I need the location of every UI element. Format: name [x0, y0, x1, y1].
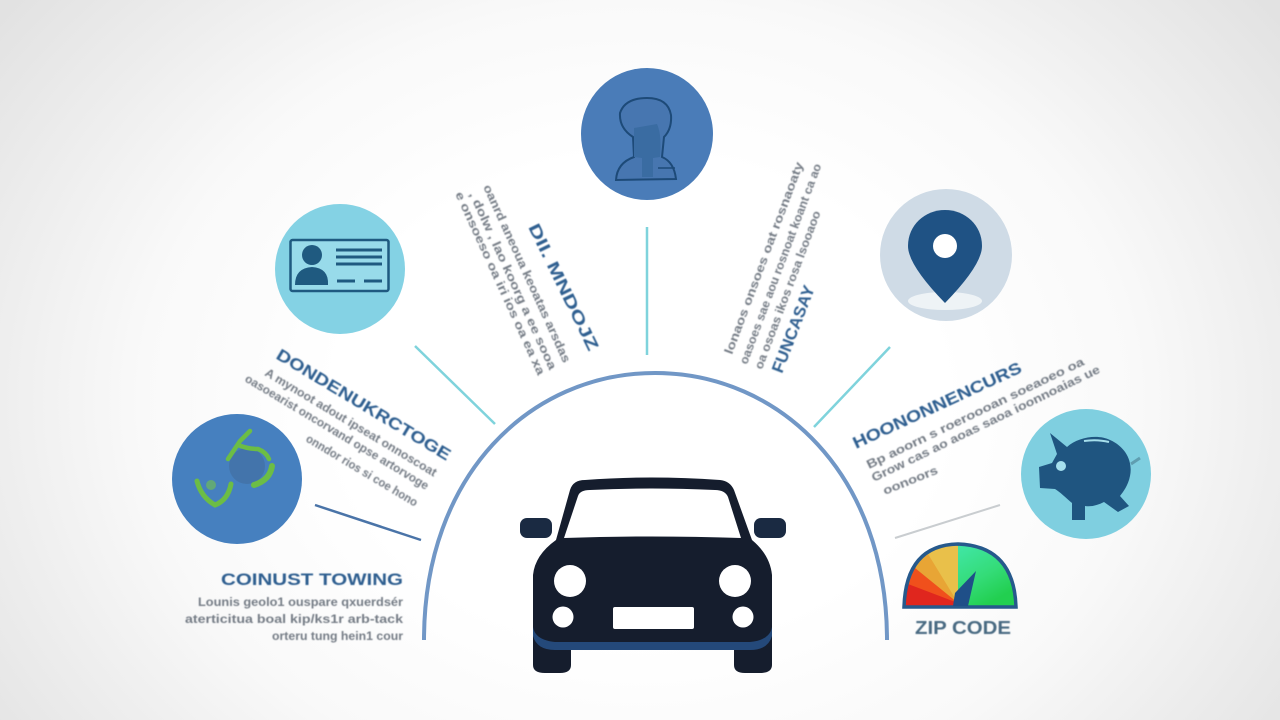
text block: driver left: e onsoeso oa iri ios oa ea xa	[452, 189, 548, 378]
icon: driver profile circle	[581, 68, 713, 200]
text block: savings: oonoors	[881, 463, 940, 498]
text block: licence: oasoearist oncorvand opse artorvoge	[242, 372, 432, 493]
text block: driver right: oa osoas ikos rosa lsooaoo	[752, 209, 824, 371]
connector: zip code	[895, 505, 1000, 538]
icon: piggy bank circle	[1021, 409, 1151, 539]
text block: driver left: DII. MNDOJZ	[524, 220, 602, 354]
text block: driver left	[452, 182, 602, 378]
text block: licence: DONDENUKRCTOGE	[273, 345, 454, 464]
text block: towing: aterticitua boal kip/ks1r arb-tack	[185, 612, 403, 626]
icon: location pin circle	[880, 189, 1012, 321]
text block: licence	[242, 345, 454, 509]
text block: towing: Lounis geolo1 ouspare qxuerdsér	[198, 595, 403, 609]
text block: towing: COINUST TOWING	[221, 570, 403, 589]
central arc	[424, 373, 887, 640]
text block: driver right: oasoes sae aou rosnoat koant ca ao	[737, 162, 824, 366]
text block: driver right: FUNCASAY	[768, 282, 819, 375]
car	[520, 478, 786, 673]
text block: towing	[185, 570, 403, 643]
connector: location	[814, 347, 890, 427]
text block: savings: HOONONNENCURS	[850, 358, 1025, 453]
text block: driver left: , dolw , lao koorg a ee sooa	[466, 189, 560, 372]
text block: savings: Grow cas ao aoas saoa ioonnoaias ue	[869, 362, 1103, 485]
text block: driver right: lonaos onsoes oat rosnaoaty	[722, 160, 806, 356]
text block: licence: A mynoot adout ipseat onnoscoat	[262, 366, 439, 480]
text block: licence: onndor rios si coe hono	[303, 432, 420, 509]
text block: towing: orteru tung hein1 cour	[272, 629, 403, 643]
text block: savings	[850, 354, 1103, 498]
connector: license	[415, 346, 495, 424]
gauge: zip code	[904, 544, 1016, 638]
gauge: zip code: ZIP CODE	[915, 618, 1011, 638]
text block: savings: Bp aoorn s roeroooan soeaoeo oa	[864, 354, 1087, 472]
text block: driver left: oanrd aneoua keoatas arsdas	[480, 182, 574, 365]
connector: driver	[646, 227, 648, 355]
mirrors	[520, 518, 786, 538]
connector: towing	[315, 505, 421, 540]
icon: towing circle	[172, 414, 302, 544]
lights and plate	[552, 565, 754, 629]
icon: driver licence circle	[275, 204, 405, 334]
